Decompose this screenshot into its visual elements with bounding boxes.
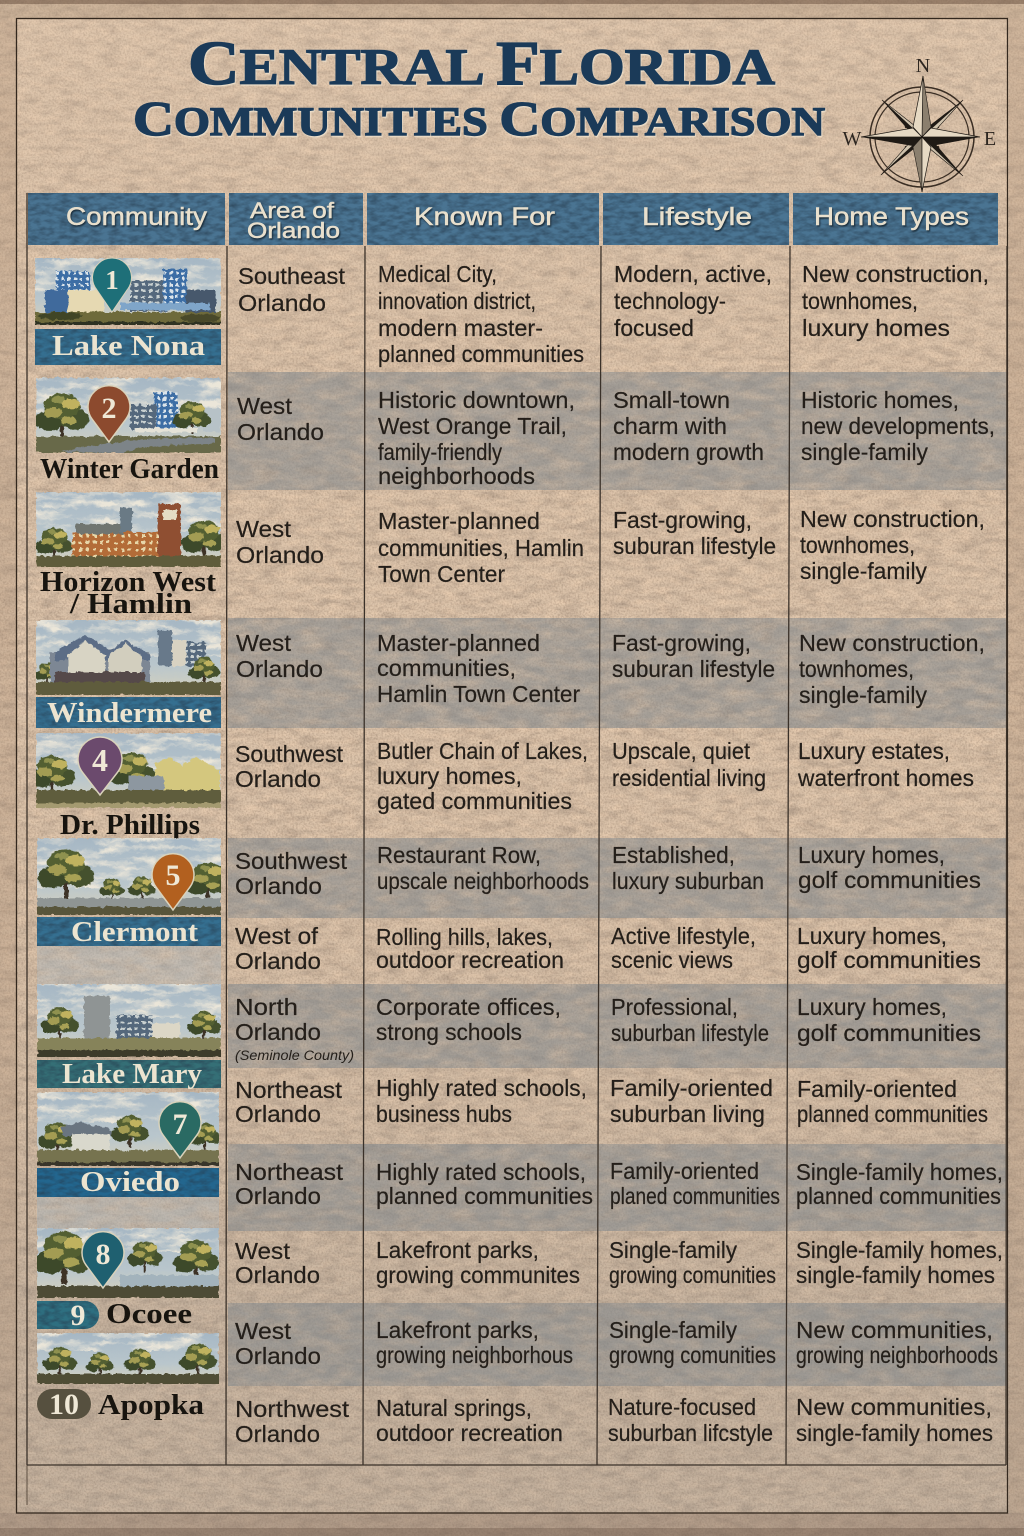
label: Lake Nona: Lake Nona	[52, 331, 205, 362]
pin 5: 5	[166, 859, 180, 892]
pin 4: 4	[92, 742, 108, 778]
row 12: Ocoee lower: Orlando	[235, 1343, 321, 1369]
header: Community: Community	[66, 203, 208, 231]
row 13: Apopka: single-family homes	[796, 1420, 993, 1446]
row 11: Ocoee upper	[235, 1237, 1003, 1288]
illustration: Lake Mary	[37, 984, 221, 1057]
Lake Nona community cell	[35, 258, 221, 365]
row 9: Oviedo upper: Family-oriented	[797, 1076, 957, 1102]
row 4: Windermere: West	[236, 630, 292, 656]
row 11: Ocoee upper: West	[235, 1238, 291, 1264]
row 8: Lake Mary: Luxury homes,	[797, 994, 947, 1020]
row 6: Clermont upper: Restaurant Row,	[377, 842, 541, 868]
row 4: Windermere: townhomes,	[799, 656, 914, 682]
row 3: Horizon West / Hamlin	[236, 506, 985, 587]
label: Clermont	[37, 917, 221, 948]
label: Ocoee: Ocoee	[106, 1299, 192, 1330]
row 2: Winter Garden: West	[237, 393, 293, 419]
row 10: Oviedo lower: Northeast	[235, 1159, 344, 1185]
Ocoee community cell	[34, 1228, 219, 1332]
row 7: Clermont lower: Active lifestyle,	[611, 923, 756, 949]
row 5: Dr. Phillips: Luxury estates,	[798, 738, 950, 764]
row 2: Winter Garden: Orlando	[237, 419, 324, 445]
row 7: Clermont lower: Orlando	[235, 948, 321, 974]
row 3: Horizon West / Hamlin: Fast-growing,	[613, 507, 752, 533]
row 7: Clermont lower: outdoor recreation	[376, 947, 564, 973]
row 11: Ocoee upper: Single-family homes,	[796, 1237, 1003, 1263]
row 5: Dr. Phillips: Southwest	[235, 741, 344, 767]
row 9: Oviedo upper: business hubs	[376, 1101, 512, 1127]
row 11: Ocoee upper: growing comunities	[609, 1262, 776, 1288]
row 13: Apopka: Natural springs,	[376, 1395, 532, 1421]
row 7: Clermont lower: West of	[235, 923, 319, 949]
label: Lake Mary: Lake Mary	[62, 1059, 202, 1090]
pin 7	[159, 1102, 201, 1158]
row 2: Winter Garden: neighborhoods	[378, 463, 535, 489]
title: CENTRAL FLORIDA	[188, 30, 775, 98]
row 4: Windermere: single-family	[799, 682, 927, 708]
label: Lake Nona	[35, 329, 221, 365]
row 10: Oviedo lower	[235, 1158, 1003, 1209]
community column	[29, 258, 231, 1421]
row 10: Oviedo lower: planed communities	[610, 1183, 780, 1209]
row 4: Windermere: New construction,	[799, 630, 985, 656]
illustration: Winter Garden	[35, 378, 221, 453]
header: Community	[28, 193, 225, 245]
row 13: Apopka: Orlando	[235, 1421, 320, 1447]
row 1: Lake Nona: Medical City,	[378, 261, 497, 287]
label: Ocoee: 9	[70, 1299, 86, 1332]
label: Horizon West / Hamlin: / Hamlin	[69, 589, 192, 620]
row 13: Apopka: Northwest	[235, 1396, 350, 1422]
title: COMMUNITIES COMPARISON	[133, 91, 825, 146]
row 9: Oviedo upper: Family-oriented	[610, 1075, 773, 1101]
label: Apopka: Apopka	[98, 1390, 204, 1421]
pin 7: 7	[172, 1108, 188, 1141]
label: Horizon West / Hamlin: Horizon West	[40, 567, 217, 598]
row 7: Clermont lower	[235, 923, 981, 974]
Windermere community cell	[35, 620, 221, 729]
row 12: Ocoee lower	[235, 1317, 998, 1369]
row 8: Lake Mary: Orlando	[235, 1019, 321, 1045]
row 9: Oviedo upper	[235, 1075, 988, 1127]
header: Home Types: Home Types	[814, 203, 969, 231]
row 10: Oviedo lower: Orlando	[235, 1183, 321, 1209]
Lake Mary community cell	[37, 984, 221, 1090]
pin 8	[82, 1232, 124, 1288]
header: Area of Orlando: Orlando	[247, 218, 340, 243]
row 5: Dr. Phillips: gated communities	[377, 788, 572, 814]
row 10: Oviedo lower: Family-oriented	[610, 1158, 759, 1184]
illustration: Windermere	[35, 620, 221, 695]
row 1: Lake Nona: Southeast	[238, 263, 346, 289]
row 7: Clermont lower: scenic views	[611, 947, 733, 973]
row 10: Oviedo lower: planned communities	[376, 1183, 593, 1209]
label: Winter Garden: Winter Garden	[40, 454, 219, 485]
row 9: Oviedo upper: suburban living	[610, 1101, 765, 1127]
illustration: Horizon West	[35, 492, 227, 567]
Winter Garden community cell	[35, 378, 221, 485]
table row shading	[228, 372, 1007, 1386]
row 1: Lake Nona: innovation district,	[378, 288, 536, 314]
row 12: Ocoee lower: Lakefront parks,	[376, 1317, 539, 1343]
row 6: Clermont upper: Orlando	[235, 873, 322, 899]
header: Known For: Known For	[414, 203, 555, 231]
row 11: Ocoee upper: Lakefront parks,	[376, 1237, 539, 1263]
row 2: Winter Garden: single-family	[801, 439, 928, 465]
row 4: Windermere	[236, 630, 985, 708]
illustration: Apopka	[37, 1333, 219, 1384]
label: Windermere: Windermere	[47, 698, 212, 729]
row 11: Ocoee upper: single-family homes	[796, 1262, 995, 1288]
header: Area of Orlando	[229, 193, 363, 245]
table grid lines	[27, 193, 1007, 1465]
table body text	[235, 261, 1003, 1447]
Apopka community cell	[37, 1333, 219, 1421]
row 6: Clermont upper: Established,	[612, 842, 735, 868]
row 6: Clermont upper: luxury suburban	[612, 868, 764, 894]
row 7: Clermont lower: golf communities	[797, 947, 981, 973]
faded sky	[37, 946, 221, 984]
row 10: Oviedo lower: Single-family homes,	[796, 1159, 1003, 1185]
row 3: Horizon West / Hamlin: suburan lifestyle	[613, 533, 776, 559]
Horizon West / Hamlin community cell	[35, 492, 227, 620]
label: Dr. Phillips: Dr. Phillips	[60, 810, 200, 841]
row 6: Clermont upper	[235, 842, 981, 899]
row 8: Lake Mary: (Seminole County)	[235, 1048, 354, 1063]
row 1: Lake Nona: townhomes,	[802, 288, 918, 314]
row 5: Dr. Phillips: Butler Chain of Lakes,	[377, 738, 588, 764]
row 1: Lake Nona: Orlando	[238, 290, 326, 316]
row 4: Windermere: Master-planned	[377, 630, 540, 656]
row 6: Clermont upper: upscale neighborhoods	[377, 868, 589, 894]
row 13: Apopka: outdoor recreation	[376, 1420, 563, 1446]
header: Area of Orlando: Area of	[250, 198, 335, 223]
row 3: Horizon West / Hamlin: townhomes,	[800, 532, 915, 558]
pin 8: 8	[96, 1238, 110, 1271]
icon: compass rose: E	[984, 128, 996, 150]
row 6: Clermont upper: Southwest	[235, 848, 348, 874]
row 3: Horizon West / Hamlin: New construction,	[800, 506, 985, 532]
row 2: Winter Garden: charm with	[613, 413, 727, 439]
row 9: Oviedo upper: planned communities	[797, 1101, 988, 1127]
table header	[28, 193, 998, 245]
row 2: Winter Garden: new developments,	[801, 413, 995, 439]
row 3: Horizon West / Hamlin: West	[236, 516, 292, 542]
row 9: Oviedo upper: Northeast	[235, 1077, 343, 1103]
row 8: Lake Mary: Professional,	[611, 994, 738, 1020]
row 8: Lake Mary: strong schools	[376, 1019, 522, 1045]
icon: compass rose: N	[916, 55, 930, 77]
row 8: Lake Mary: suburban lifestyle	[611, 1020, 769, 1046]
row 2: Winter Garden: modern growth	[613, 439, 764, 465]
icon: compass rose: W	[843, 128, 862, 150]
row 4: Windermere: Fast-growing,	[612, 630, 751, 656]
row 2: Winter Garden	[237, 387, 995, 489]
row 3: Horizon West / Hamlin: Town Center	[378, 561, 505, 587]
illustration: Clermont	[37, 838, 231, 915]
row 4: Windermere: suburan lifestyle	[612, 656, 775, 682]
illustration: Dr. Phillips	[29, 733, 221, 808]
label: Ocoee	[37, 1299, 192, 1332]
label: Apopka	[37, 1388, 204, 1421]
row 4: Windermere: Hamlin Town Center	[377, 681, 580, 707]
row 3: Horizon West / Hamlin: communities, Hamlin	[378, 535, 584, 561]
pin 1: 1	[105, 265, 119, 295]
row 1: Lake Nona: planned communities	[378, 341, 584, 367]
label: Oviedo	[37, 1167, 219, 1198]
row 4: Windermere: communities,	[377, 655, 516, 681]
icon: compass rose	[843, 55, 996, 192]
pin 4	[78, 737, 122, 795]
header: Lifestyle: Lifestyle	[642, 203, 752, 231]
row 12: Ocoee lower: Single-family	[609, 1317, 737, 1343]
label: Horizon West / Hamlin	[40, 567, 217, 620]
pin 5	[152, 854, 194, 910]
row 3: Horizon West / Hamlin: Orlando	[236, 542, 324, 568]
row 5: Dr. Phillips: Upscale, quiet	[612, 738, 751, 764]
row 13: Apopka: New communities,	[796, 1394, 992, 1420]
pin 1	[92, 258, 132, 312]
label: Clermont: Clermont	[71, 917, 199, 948]
illustration: Ocoee	[34, 1228, 219, 1298]
row 8: Lake Mary: golf communities	[797, 1020, 981, 1046]
row 5: Dr. Phillips: luxury homes,	[377, 763, 522, 789]
row 1: Lake Nona: modern master-	[378, 315, 543, 341]
row 2: Winter Garden: family-friendly	[378, 439, 502, 465]
pin 2: 2	[102, 392, 116, 425]
Oviedo community cell	[37, 1092, 221, 1228]
row 9: Oviedo upper: Orlando	[235, 1101, 321, 1127]
row 13: Apopka	[235, 1394, 993, 1447]
header: Home Types	[793, 193, 998, 245]
row 3: Horizon West / Hamlin: single-family	[800, 558, 927, 584]
row 2: Winter Garden: Historic homes,	[801, 387, 959, 413]
row 4: Windermere: Orlando	[236, 656, 323, 682]
Dr. Phillips community cell	[29, 733, 221, 841]
label: Apopka: 10	[49, 1388, 79, 1421]
faded sky	[37, 1197, 219, 1228]
row 10: Oviedo lower: Highly rated schools,	[376, 1159, 586, 1185]
Clermont community cell	[37, 838, 231, 984]
row 5: Dr. Phillips: Orlando	[235, 766, 321, 792]
row 12: Ocoee lower: growing neighborhous	[376, 1342, 573, 1368]
row 2: Winter Garden: Small-town	[613, 387, 730, 413]
illustration: Lake Nona	[35, 258, 221, 325]
row 7: Clermont lower: Rolling hills, lakes,	[376, 924, 553, 950]
row 3: Horizon West / Hamlin: Master-planned	[378, 508, 540, 534]
row 8: Lake Mary	[235, 994, 981, 1063]
row 1: Lake Nona: luxury homes	[802, 315, 950, 341]
row 1: Lake Nona: Modern, active,	[614, 261, 772, 287]
title	[133, 30, 825, 146]
row 1: Lake Nona: New construction,	[802, 261, 989, 287]
row 8: Lake Mary: North	[235, 994, 298, 1020]
row 1: Lake Nona	[238, 261, 989, 367]
row 6: Clermont upper: Luxury homes,	[798, 842, 945, 868]
row 12: Ocoee lower: growng comunities	[609, 1342, 776, 1368]
label: Oviedo: Oviedo	[80, 1167, 180, 1198]
row 8: Lake Mary: Corporate offices,	[376, 994, 561, 1020]
row 11: Ocoee upper: Single-family	[609, 1237, 737, 1263]
row 5: Dr. Phillips: waterfront homes	[797, 765, 974, 791]
illustration: Oviedo	[37, 1092, 221, 1166]
header: Lifestyle	[603, 193, 789, 245]
row 2: Winter Garden: West Orange Trail,	[378, 413, 567, 439]
row 13: Apopka: Nature-focused	[608, 1394, 756, 1420]
row 5: Dr. Phillips	[235, 738, 974, 814]
row 1: Lake Nona: technology-	[614, 288, 726, 314]
row 12: Ocoee lower: New communities,	[796, 1317, 993, 1343]
row 12: Ocoee lower: West	[235, 1318, 292, 1344]
row 11: Ocoee upper: growing communites	[376, 1262, 580, 1288]
row 13: Apopka: suburban lifcstyle	[608, 1420, 773, 1446]
row 7: Clermont lower: Luxury homes,	[797, 923, 947, 949]
pin 2	[88, 386, 130, 442]
header: Known For	[367, 193, 599, 245]
row 1: Lake Nona: focused	[614, 315, 694, 341]
row 6: Clermont upper: golf communities	[798, 867, 981, 893]
row 11: Ocoee upper: Orlando	[235, 1262, 320, 1288]
row 5: Dr. Phillips: residential living	[612, 765, 766, 791]
row 10: Oviedo lower: planned communities	[796, 1183, 1001, 1209]
row 2: Winter Garden: Historic downtown,	[378, 387, 575, 413]
row 9: Oviedo upper: Highly rated schools,	[376, 1075, 587, 1101]
